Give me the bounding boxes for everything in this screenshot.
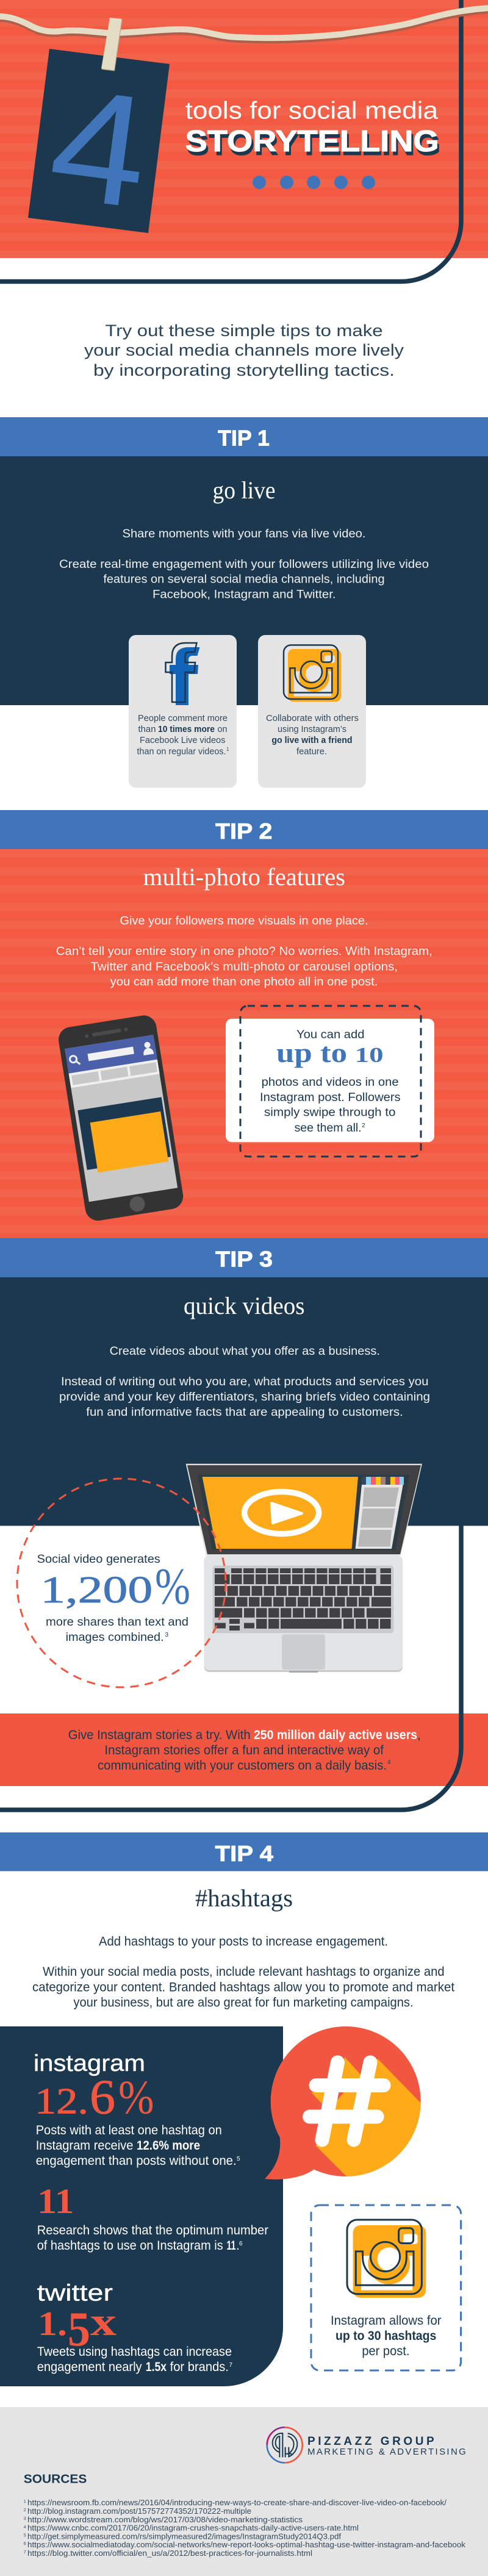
icon: instagram large	[347, 2220, 426, 2298]
title: tools for social media	[185, 98, 439, 124]
text: multi-photo body: you can add more than one photo all in one post.	[110, 976, 378, 989]
illustration: laptop	[186, 1464, 422, 1673]
text: source list	[24, 2499, 466, 2558]
text: source list: 5	[24, 2534, 26, 2538]
panel: tip 3	[0, 1238, 488, 1810]
stat: instagram: engagement than posts without one.	[36, 2154, 237, 2168]
heading: quick videos: quick videos	[184, 1292, 305, 1319]
stat: instagram: %	[118, 2071, 154, 2124]
stat: optimum hashtags: Research shows that the optimum number	[37, 2223, 268, 2237]
text: quick videos body: Instead of writing out who you are, what products and services you	[61, 1376, 428, 1388]
band: tip 1	[0, 417, 488, 456]
text: go live body: Create real-time engagement with your followers utilizing live video	[59, 558, 429, 571]
text: source list: https://newsroom.fb.com/news/2016/04/introducing-new-ways-to-create-share-and-discover-live-video-on-facebook/	[27, 2499, 447, 2507]
callout: 1,200%: 3	[165, 1632, 168, 1638]
callout: 30 hashtags	[311, 2205, 461, 2370]
stat: twitter: 1.5x	[146, 2360, 167, 2374]
stat: instagram: instagram	[34, 2051, 145, 2076]
text: go live body	[59, 528, 429, 601]
text: facebook stat: than on regular videos.	[137, 746, 226, 756]
text: go live body: features on several social media channels, including	[103, 573, 385, 586]
panel: tip 2	[0, 810, 488, 1238]
text: source list: https://www.cnbc.com/2017/06/20/instagram-crushes-snapchats-daily-active-users-rate.html	[27, 2524, 359, 2533]
stat: optimum hashtags: .	[236, 2239, 240, 2253]
text: hashtags body: categorize your content. Branded hashtags allow you to promote and market	[32, 1981, 454, 1995]
card: instagram	[258, 635, 366, 788]
panel: tip 1	[0, 417, 488, 788]
stat: twitter: Tweets using hashtags can increase	[37, 2345, 232, 2359]
title: STORYTELLING	[185, 125, 439, 158]
logo: Pizzazz Group: PIZZAZZ GROUP	[307, 2435, 434, 2448]
text: source list: 3	[24, 2517, 26, 2521]
stat: optimum hashtags: 11	[227, 2239, 236, 2253]
stat: twitter: engagement nearly	[37, 2360, 142, 2374]
text: facebook stat: 10 times more	[158, 724, 215, 734]
icon: hashtag speech bubble	[265, 2026, 421, 2180]
card: facebook	[129, 635, 237, 788]
text: instagram stat: Collaborate with others	[266, 713, 359, 723]
callout: 30 hashtags: per post.	[362, 2344, 409, 2358]
band: instagram stories: 4	[387, 1759, 391, 1766]
text: facebook stat: People comment more	[138, 713, 228, 723]
text: hashtags body	[32, 1935, 454, 2009]
callout: up to 10: 2	[362, 1122, 365, 1129]
text: source list: 7	[24, 2550, 26, 2555]
panel: hashtag stats	[0, 2026, 283, 2386]
callout: 1,200%: 1,200	[40, 1570, 152, 1611]
title	[185, 98, 441, 162]
callout: up to 10: 10	[355, 1043, 384, 1067]
logo: Pizzazz Group: MARKETING & ADVERTISING	[307, 2447, 466, 2457]
text: source list: https://www.socialmediatoday.com/social-networks/new-report-looks-optimal-hashtag-use-twitter-instagram-and-facebook	[27, 2541, 466, 2549]
text: instagram stat: using Instagram’s	[278, 724, 346, 734]
logo: Pizzazz Group	[267, 2427, 466, 2463]
band: tip 2: TIP 2	[215, 819, 272, 844]
callout: 30 hashtags: up to 30 hashtags	[336, 2329, 436, 2343]
stat: optimum hashtags: 11	[37, 2181, 74, 2221]
panel: footer	[0, 2407, 488, 2576]
band: tip 3: TIP 3	[215, 1246, 273, 1271]
stat: optimum hashtags: 6	[239, 2241, 243, 2247]
text: instagram stat: feature.	[296, 746, 327, 756]
text: source list: 6	[24, 2542, 26, 2546]
heading: multi-photo features: multi-photo features	[143, 863, 345, 891]
stat: twitter: x	[90, 2300, 117, 2344]
band: instagram stories	[0, 1713, 488, 1786]
callout: up to 10: You can add	[296, 1028, 365, 1041]
panel: hero header	[0, 0, 488, 282]
text: hashtags body: your business, but are also great for fun marketing campaigns.	[73, 1996, 414, 2009]
dots	[253, 176, 375, 189]
callout: 1,200%: more shares than text and	[46, 1615, 188, 1629]
dashed circle	[17, 1479, 226, 1687]
callout: 1,200%: %	[155, 1558, 190, 1615]
stat: optimum hashtags	[37, 2181, 268, 2253]
rope	[0, 8, 488, 40]
callout: up to 10: see them all.	[295, 1122, 362, 1135]
band: tip 1: TIP 1	[218, 426, 270, 450]
band: instagram stories: 250 million daily active users	[254, 1728, 417, 1742]
text: multi-photo body: Give your followers more visuals in one place.	[120, 915, 368, 928]
text: facebook stat: 1	[226, 747, 229, 752]
stat: instagram: 12.	[35, 2081, 88, 2122]
band: instagram stories: Instagram stories offer a fun and interactive way of	[104, 1743, 384, 1757]
band: tip 3	[0, 1238, 488, 1277]
text: multi-photo body	[56, 915, 432, 989]
text: source list: http://get.simplymeasured.com/rs/simplymeasured2/images/InstagramStudy2014Q3.pdf	[27, 2532, 342, 2541]
icon: facebook f	[166, 643, 200, 705]
intro text: Try out these simple tips to make	[105, 321, 383, 340]
callout: up to 10: simply swipe through to	[264, 1107, 395, 1119]
intro text: by incorporating storytelling tactics.	[93, 361, 395, 379]
callout: 30 hashtags: Instagram allows for	[331, 2314, 442, 2328]
callout: up to 10	[226, 1006, 434, 1157]
callout: up to 10: up to	[276, 1037, 347, 1068]
stat: instagram: Posts with at least one hashtag on	[36, 2123, 222, 2137]
text: facebook stat: than	[138, 724, 156, 734]
panel: tip 4	[0, 1832, 488, 2386]
hanging card with number 4: 4	[41, 54, 158, 242]
band: tip 4	[0, 1832, 488, 1871]
text: source list: http://blog.instagram.com/post/157572774352/170222-multiple	[27, 2507, 251, 2516]
stat: optimum hashtags: of hashtags to use on Instagram is	[37, 2239, 223, 2253]
icon: instagram	[284, 645, 341, 701]
band: tip 4: TIP 4	[215, 1841, 273, 1866]
text: multi-photo body: Can’t tell your entire story in one photo? No worries. With Instagram,	[56, 945, 432, 958]
text: source list: 1	[24, 2500, 26, 2504]
clothespin	[101, 18, 122, 71]
stat: twitter: 1.	[38, 2305, 67, 2343]
text: source list: http://www.wordstream.com/blog/ws/2017/03/08/video-marketing-statistics	[27, 2516, 303, 2524]
stat: instagram	[34, 2051, 240, 2168]
icon: smartphone	[57, 1014, 185, 1222]
intro text	[84, 321, 404, 379]
text: go live body: Share moments with your fans via live video.	[122, 528, 366, 540]
callout: 1,200%	[37, 1552, 190, 1644]
text: facebook stat: Facebook Live videos	[140, 735, 225, 745]
callout: up to 10: photos and videos in one	[262, 1076, 399, 1089]
text: source list: 4	[24, 2525, 26, 2530]
text: quick videos body: provide and your key differentiators, sharing briefs video containing	[59, 1391, 430, 1404]
stat: instagram: 6	[90, 2071, 115, 2125]
stat: twitter: twitter	[37, 2280, 113, 2306]
stat: instagram: 5	[237, 2156, 240, 2162]
text: source list: 2	[24, 2508, 26, 2513]
text: hashtags body: Within your social media posts, include relevant hashtags to organize and	[43, 1965, 445, 1979]
text: instagram stat: go live with a friend	[271, 735, 353, 745]
stat: instagram: Instagram receive	[36, 2139, 133, 2153]
callout: 1,200%: Social video generates	[37, 1552, 160, 1566]
heading: hashtags: #hashtags	[195, 1884, 293, 1912]
callout: up to 10: Instagram post. Followers	[260, 1091, 401, 1104]
band: instagram stories: communicating with your customers on a daily basis.	[98, 1759, 387, 1773]
text: facebook stat	[137, 713, 229, 756]
band: tip 2	[0, 810, 488, 849]
text: quick videos body	[59, 1345, 430, 1419]
stat: twitter	[37, 2280, 232, 2374]
text: hashtags body: Add hashtags to your posts to increase engagement.	[99, 1935, 388, 1949]
band: instagram stories: Give Instagram stories a try. With	[68, 1728, 251, 1742]
frame line: hero corner	[0, 0, 461, 282]
heading: sources: SOURCES	[24, 2473, 87, 2486]
text: source list: https://blog.twitter.com/official/en_us/a/2012/best-practices-for-journalists.html	[27, 2549, 312, 2558]
text: quick videos body: Create videos about what you offer as a business.	[110, 1345, 380, 1358]
text: multi-photo body: Twitter and Facebook’s multi-photo or carousel options,	[90, 961, 398, 974]
stat: twitter: 5	[68, 2303, 90, 2356]
intro text: your social media channels more lively	[84, 341, 404, 359]
text: facebook stat: on	[217, 724, 227, 734]
heading: go live: go live	[212, 476, 276, 504]
text: instagram stat	[266, 713, 359, 756]
stat: instagram: 12.6% more	[137, 2139, 200, 2153]
title: STORYTELLING	[187, 129, 441, 162]
band: instagram stories: ,	[417, 1728, 421, 1742]
stat: twitter: 7	[229, 2362, 233, 2369]
frame line: tip 3 corner	[0, 1526, 461, 1810]
text: quick videos body: fun and informative facts that are appealing to customers.	[86, 1406, 403, 1419]
callout: 1,200%: images combined.	[66, 1631, 164, 1644]
text: go live body: Facebook, Instagram and Twitter.	[152, 588, 336, 601]
stat: twitter: for brands.	[170, 2360, 229, 2374]
